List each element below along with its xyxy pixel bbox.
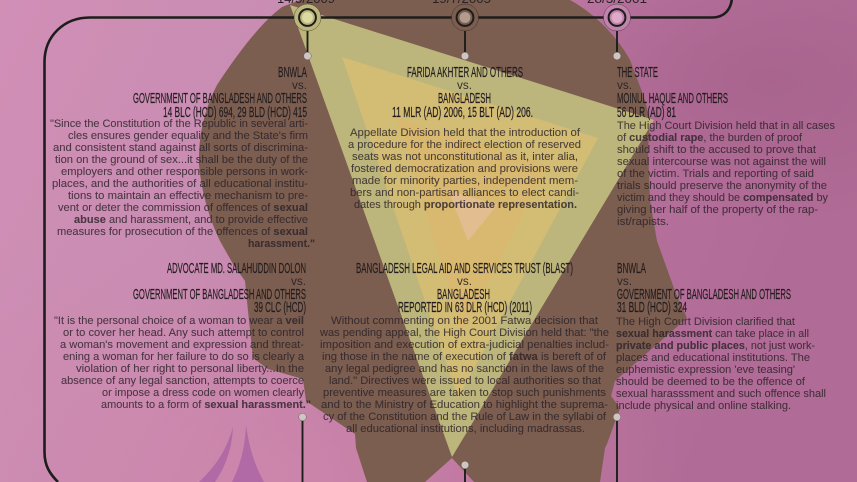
text block: sexual harassment can take place in all: [616, 328, 809, 340]
heading: vs.: [457, 78, 472, 92]
text block: tion on the ground of sex...it shall be the duty of the: [55, 154, 308, 166]
panel: case BNWLA 2009: [50, 65, 315, 250]
heading: [133, 65, 307, 121]
text block: giving her half of the property of the rap-: [617, 204, 818, 216]
heading: [356, 261, 573, 316]
heading: vs.: [617, 274, 632, 288]
heading: THE STATE: [617, 65, 658, 81]
text block: [348, 127, 581, 211]
text block: seats was not unconstitutional as it, inter alia,: [352, 151, 578, 163]
heading: 39 CLC (HCD): [254, 300, 306, 316]
text block: [616, 316, 826, 412]
inner triangle: [448, 190, 497, 241]
text block: victim and they should be compensated by: [617, 192, 828, 204]
text block: should shift to the accused to prove that: [617, 144, 816, 156]
third triangle: [397, 118, 548, 332]
text block: a procedure for the indirect election of reserved: [348, 139, 581, 151]
text block: and to the Ministry of Education to highlight the suprema-: [321, 399, 608, 411]
heading: GOVERNMENT OF BANGLADESH AND OTHERS: [133, 287, 306, 303]
outer triangle: [290, 5, 654, 457]
node 1: [294, 4, 321, 31]
text block: The High Court Division held that in all cases: [617, 120, 835, 132]
text block: [54, 315, 311, 411]
pin dots: [299, 52, 621, 469]
illustration: veiled figure with triangles: [199, 0, 687, 482]
heading: [617, 261, 791, 316]
text block: trials should preserve the anonymity of the: [617, 180, 827, 192]
text block: [617, 120, 835, 228]
heading: 14 BLC (HCD) 694, 29 BLD (HCD) 415: [163, 105, 307, 121]
heading: 11 MLR (AD) 2006, 15 BLT (AD) 206.: [392, 105, 533, 121]
text block: [319, 315, 609, 435]
heading: vs.: [292, 78, 307, 92]
text block: employers and other responsible persons in work-: [61, 166, 308, 178]
second triangle: [342, 57, 598, 398]
text block: include physical and online stalking.: [616, 400, 791, 412]
text block: tions to maintain an effective mechanism to pre-: [68, 190, 308, 202]
text block: all educational institutions, including madrassas.: [346, 423, 585, 435]
text block: or impose a dress code on women clearly: [102, 387, 304, 399]
heading: BANGLADESH LEGAL AID AND SERVICES TRUST (BLAST): [356, 261, 573, 277]
text block: Appellate Division held that the introduction of: [350, 127, 581, 139]
heading: 31 BLD (HCD) 324: [617, 300, 687, 316]
text block: euphemistic expression 'eve teasing': [616, 364, 795, 376]
panel: case Salahuddin Dolon: [54, 261, 311, 411]
text block: of custodial rape, the burden of proof: [617, 132, 803, 144]
heading: BNWLA: [617, 261, 646, 277]
brown head silhouette: [199, 0, 687, 482]
text block: sexual intercourse was not against the will: [617, 156, 826, 168]
heading: ADVOCATE MD. SALAHUDDIN DOLON: [167, 261, 306, 277]
heading: BANGLADESH: [437, 287, 490, 303]
text block: should be deemed to be the offence of: [616, 376, 806, 388]
text block: or to cover her head. Any such attempt to control: [63, 327, 304, 339]
flame petals: [199, 425, 264, 482]
text block: was pending appeal, the High Court Division held that: "the: [319, 327, 609, 339]
stem pins top: [302, 25, 617, 482]
text block: made for minority parties, independent mem-: [352, 175, 578, 187]
text block: ist/rapists.: [617, 216, 669, 228]
heading: [617, 65, 728, 121]
text block: ening a woman for her failure to do so is clearly a: [63, 351, 305, 363]
panel: case BNWLA harassment: [616, 261, 826, 412]
text block: Without commenting on the 2001 Fatwa decision that: [331, 315, 598, 327]
text block: [50, 118, 315, 250]
heading: MOINUL HAQUE AND OTHERS: [617, 91, 728, 107]
text block: The High Court Division clarified that: [616, 316, 795, 328]
heading: FARIDA AKHTER AND OTHERS: [407, 65, 523, 81]
heading: 56 DLR (AD) 81: [617, 105, 676, 121]
text block: places and educational institutions. The: [616, 352, 810, 364]
text block: fostered democratization and provisions were: [351, 163, 578, 175]
text block: measures for prosecution of the offences of sexual: [57, 226, 308, 238]
text block: sexual harasssment and such offence shall: [616, 388, 826, 400]
text block: imposition and execution of extra-judicial penalties includ-: [320, 339, 609, 351]
text block: abuse and harassment, and to provide effective: [74, 214, 308, 226]
text block: ing those in the name of execution of fatwa is bereft of of: [322, 351, 607, 363]
text block: violation of her right to personal liberty...In the: [76, 363, 304, 375]
heading: REPORTED IN 63 DLR (HCD) (2011): [398, 300, 532, 316]
text block: amounts to a form of sexual harassment.": [101, 399, 311, 411]
text block: cy of the Constitution and the Rule of Law in the syllabi of: [323, 411, 607, 423]
heading: [392, 65, 533, 121]
heading: GOVERNMENT OF BANGLADESH AND OTHERS: [133, 91, 307, 107]
text block: land." Directives were issued to local authorities so that: [329, 375, 601, 387]
text block: any legal pedigree and has no sanction in the laws of the: [325, 363, 604, 375]
text block: cles ensures gender equality and the State's firm: [68, 130, 308, 142]
text block: private and public places, not just work-: [616, 340, 815, 352]
text block: absence of any legal sanction, attempts to coerce: [61, 375, 304, 387]
node 3: [604, 4, 630, 31]
text block: of the victim. Trials and reporting of said: [617, 168, 814, 180]
heading: BNWLA: [278, 65, 307, 81]
text block: bers and non-partisan alliances to elect candi-: [350, 187, 579, 199]
panel: case Farida Akhter: [348, 65, 581, 211]
heading: vs.: [457, 274, 472, 288]
text block: "Since the Constitution of the Republic in several arti-: [50, 118, 308, 130]
text block: preventive measures are taken to stop such punishments: [323, 387, 606, 399]
panel: case The State: [617, 65, 835, 228]
node 2: [452, 4, 478, 31]
text block: "It is the personal choice of a woman to wear a veil: [54, 315, 304, 327]
text block: places, and the authorities of all educational institu-: [52, 178, 308, 190]
text block: dates through proportionate representation.: [354, 199, 577, 211]
heading: vs.: [617, 78, 632, 92]
text block: harassment.": [248, 238, 315, 250]
panel: case BLAST: [319, 261, 609, 435]
heading: BANGLADESH: [438, 91, 491, 107]
heading: vs.: [291, 274, 306, 288]
heading: [133, 261, 306, 316]
text block: and consistent stand against all sorts of discrimina-: [53, 142, 308, 154]
text block: vent or deter the commission of offences of sexual: [58, 202, 308, 214]
text block: a woman's movement and expression and threat-: [60, 339, 304, 351]
